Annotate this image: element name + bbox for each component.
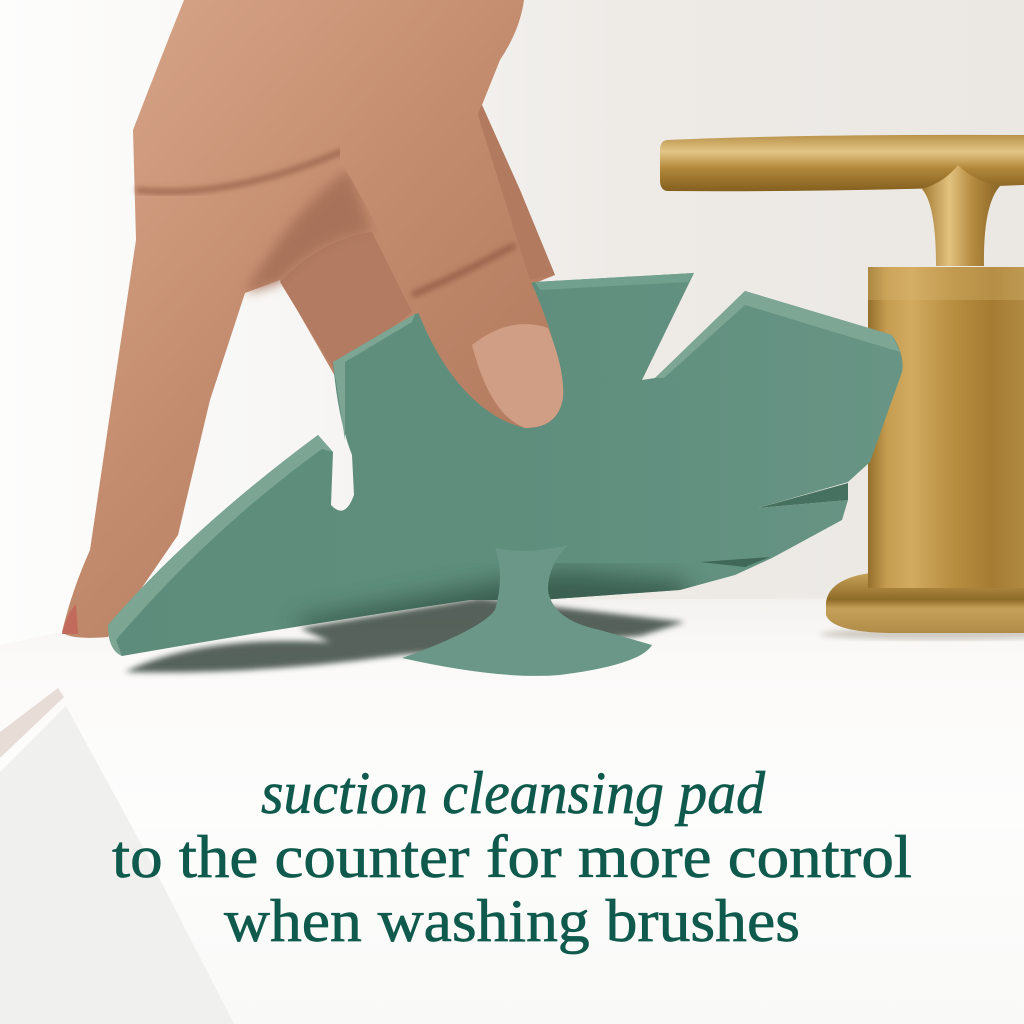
counter and basin	[0, 598, 1024, 1024]
shadow under pad	[125, 598, 685, 672]
background wall	[0, 0, 1024, 660]
icon: leaf-shaped silicone pad	[108, 273, 903, 676]
caption	[112, 760, 912, 954]
icon: hand behind pad	[62, 0, 555, 638]
icon: brass faucet	[660, 135, 1024, 640]
pad suction stem	[402, 545, 652, 676]
caption line 3: when washing brushes	[224, 888, 800, 954]
icon: finger pressing pad	[340, 90, 563, 428]
caption line 1: suction cleansing pad	[261, 760, 766, 826]
caption line 2: to the counter for more control	[112, 824, 912, 890]
